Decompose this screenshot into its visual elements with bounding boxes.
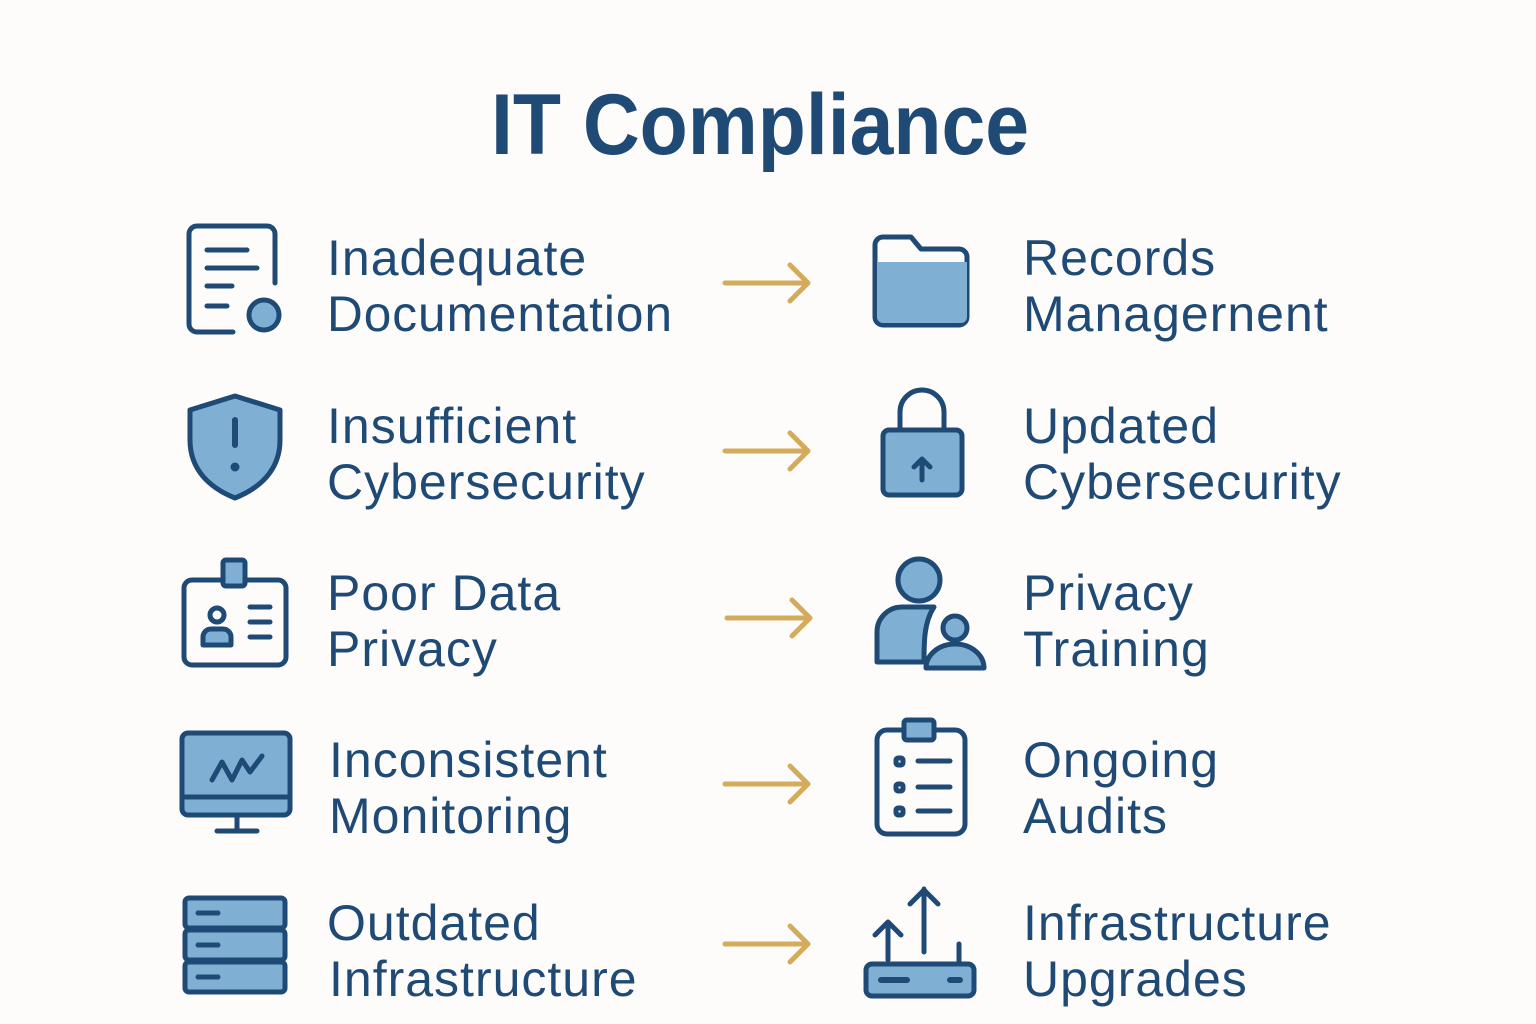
left labels: Infrastructure: [329, 951, 638, 1007]
right labels: Audits: [1023, 788, 1168, 844]
icon: padlock: [883, 390, 962, 495]
left labels: Outdated: [327, 895, 541, 951]
right labels: Privacy: [1023, 565, 1194, 621]
left labels: Inconsistent: [329, 732, 608, 788]
icon: shield: [190, 396, 280, 498]
left labels: Monitoring: [329, 788, 572, 844]
right labels: Updated: [1023, 398, 1219, 454]
title: IT Compliance: [491, 77, 1029, 173]
right labels: Upgrades: [1023, 951, 1248, 1007]
right labels: Ongoing: [1023, 732, 1219, 788]
left labels: Documentation: [327, 286, 673, 342]
right labels: [1023, 230, 1342, 1007]
right labels: Training: [1023, 621, 1210, 677]
arrows: [725, 265, 810, 962]
icon: server stack: [185, 898, 285, 992]
left labels: Privacy: [327, 621, 498, 677]
left labels: Poor Data: [327, 565, 561, 621]
icon: document: [189, 226, 279, 332]
icon: router upgrade: [866, 889, 974, 996]
left labels: Insufficient: [327, 398, 577, 454]
right labels: Cybersecurity: [1023, 454, 1342, 510]
icon: folder: [875, 237, 967, 325]
left labels: [327, 230, 673, 1007]
icon: users: [877, 559, 984, 668]
right labels: Infrastructure: [1023, 895, 1332, 951]
right labels: Managernent: [1023, 286, 1329, 342]
left labels: Inadequate: [327, 230, 587, 286]
icon: id badge: [184, 560, 286, 665]
right labels: Records: [1023, 230, 1216, 286]
left labels: Cybersecurity: [327, 454, 646, 510]
icon: monitor: [182, 733, 290, 831]
icon: clipboard: [877, 720, 965, 834]
